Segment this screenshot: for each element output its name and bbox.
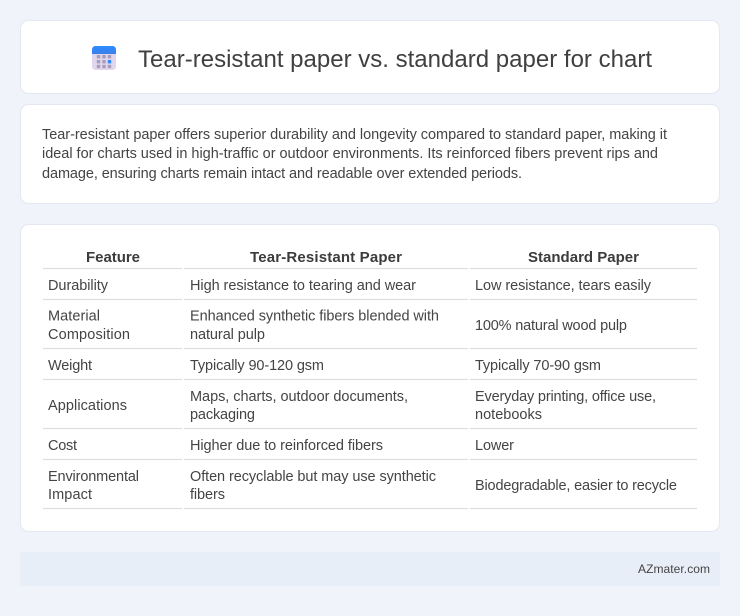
row: applications: Applications bbox=[48, 398, 127, 414]
row: material composition: Composition bbox=[48, 327, 130, 343]
row: environmental impact: Impact bbox=[48, 487, 92, 503]
row: environmental impact: Often recyclable but may use synthetic bbox=[190, 469, 436, 485]
panel: title card bbox=[20, 20, 720, 94]
row: durability bbox=[48, 278, 652, 294]
row: weight: Weight bbox=[48, 358, 92, 374]
row: cost: Lower bbox=[475, 438, 514, 454]
row: material composition bbox=[48, 308, 627, 343]
intro text: damage, ensuring charts remain intact and readable over extended periods. bbox=[42, 166, 522, 182]
icon: calendar bbox=[92, 46, 116, 70]
row: durability: High resistance to tearing and wear bbox=[190, 278, 416, 294]
row: applications bbox=[48, 389, 656, 423]
row: cost: Cost bbox=[48, 438, 77, 454]
row: weight: Typically 70-90 gsm bbox=[475, 358, 601, 374]
table header: Feature bbox=[86, 249, 140, 266]
row: applications: Maps, charts, outdoor documents, bbox=[190, 389, 408, 405]
footer credit: AZmater.com bbox=[638, 562, 710, 576]
title: Tear-resistant paper vs. standard paper for chart bbox=[138, 46, 652, 73]
footer bbox=[20, 552, 720, 586]
row: environmental impact bbox=[48, 469, 677, 503]
intro text: ideal for charts used in high-traffic or outdoor environments. Its reinforced fibers prevent rips and bbox=[42, 146, 658, 162]
row: material composition: 100% natural wood pulp bbox=[475, 318, 627, 334]
row: material composition: Enhanced synthetic fibers blended with bbox=[190, 308, 439, 324]
row: durability: Low resistance, tears easily bbox=[475, 278, 652, 294]
table header: Tear-Resistant Paper bbox=[250, 249, 402, 266]
row: material composition: natural pulp bbox=[190, 327, 265, 343]
table header: Standard Paper bbox=[528, 249, 639, 266]
intro text bbox=[42, 127, 667, 182]
panel: comparison table bbox=[20, 224, 720, 532]
row: applications: notebooks bbox=[475, 407, 542, 423]
row: durability: Durability bbox=[48, 278, 109, 294]
row: environmental impact: Biodegradable, easier to recycle bbox=[475, 478, 677, 494]
row: weight: Typically 90-120 gsm bbox=[190, 358, 324, 374]
intro text: Tear-resistant paper offers superior durability and longevity compared to standard paper, making it bbox=[42, 127, 667, 143]
row: material composition: Material bbox=[48, 308, 100, 324]
row: weight bbox=[48, 358, 601, 374]
row: cost bbox=[48, 438, 514, 454]
row: applications: Everyday printing, office use, bbox=[475, 389, 656, 405]
row: environmental impact: Environmental bbox=[48, 469, 139, 485]
row: applications: packaging bbox=[190, 407, 255, 423]
table header bbox=[86, 249, 639, 266]
panel: introduction bbox=[20, 104, 720, 204]
row: environmental impact: fibers bbox=[190, 487, 225, 503]
row: cost: Higher due to reinforced fibers bbox=[190, 438, 383, 454]
